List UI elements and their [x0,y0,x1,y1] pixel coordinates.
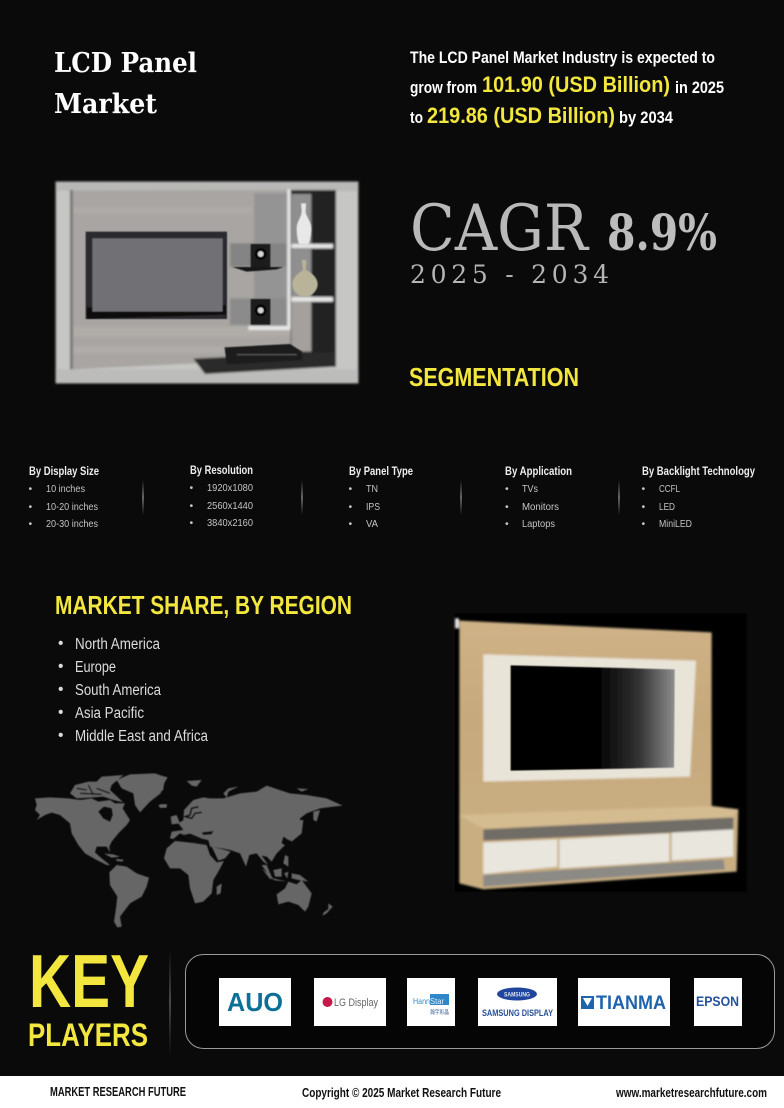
market forecast statement: by 2034 [619,108,673,127]
region list: Asia Pacific [75,705,144,722]
segment: by backlight technology [642,464,755,530]
segment: by resolution: 1920x1080 [207,482,253,494]
segment: by display size: By Display Size [29,464,99,478]
segment: by resolution: By Resolution [190,463,253,477]
segment: by resolution: • [190,500,194,512]
segment: by resolution: • [190,517,194,529]
segment: by resolution: 3840x2160 [207,517,253,529]
CAGR figure: 8.9% [607,203,717,262]
segment: by display size: 20-30 inches [46,518,98,530]
logo: LG Display: LG Display [334,997,378,1009]
segment: by application: By Application [505,464,572,478]
region list: Europe [75,659,116,676]
market forecast statement: grow from [410,78,477,97]
logo: HannStar: Hann [413,997,430,1006]
CAGR figure: CAGR [410,192,590,266]
panel: company logos [186,954,774,1048]
logo: Epson: EPSON [696,994,739,1009]
segment: by display size: 10-20 inches [46,501,98,513]
world map [35,773,343,927]
segment: by panel type [348,464,413,530]
segment: by backlight technology: By Backlight Technology [642,464,755,478]
market forecast statement [410,48,724,128]
region list: • [58,658,63,675]
region list: • [58,635,63,652]
CAGR figure [410,192,717,289]
segment: by backlight technology: • [642,483,646,495]
segment: by application [505,464,572,530]
segment: by application: • [505,518,509,530]
region list: • [58,727,63,744]
logo: Samsung Display: SAMSUNG [504,992,530,998]
segment: by backlight technology: • [642,501,646,513]
segment: by backlight technology: MiniLED [659,518,692,530]
market forecast statement: 219.86 (USD Billion) [427,103,615,128]
logo: Tianma: TIANMA [596,993,666,1014]
segment: by display size: • [28,518,32,530]
segment: by display size: • [28,483,32,495]
market forecast statement: to [410,108,423,127]
logo: HannStar: 瀚宇彩晶 [430,1008,449,1016]
segment: by application: • [505,483,509,495]
segment: by panel type: • [348,518,352,530]
logo: AUO: AUO [227,987,283,1017]
region list: • [58,704,63,721]
heading: key players [28,939,149,1053]
market forecast statement: 101.90 (USD Billion) [482,72,670,97]
segment: by application: TVs [522,483,538,495]
heading: market share by region: MARKET SHARE, BY REGION [55,590,352,620]
logo: HannStar: Star [430,997,444,1006]
logo: HannStar [407,978,455,1026]
region list: North America [75,636,160,653]
market forecast statement: The LCD Panel Market Industry is expected to [410,48,715,67]
region list: • [58,681,63,698]
segment: by display size: • [28,501,32,513]
logo: Samsung Display: SAMSUNG DISPLAY [482,1008,554,1019]
title [54,47,197,120]
image: TV on wooden wall panel with cabinet [455,613,747,892]
region list [58,635,208,745]
segment: by backlight technology: LED [659,501,675,513]
logo: Epson [694,978,742,1026]
title: LCD Panel [54,47,197,79]
segment: by panel type: VA [366,518,378,530]
segment: by application: Monitors [522,501,559,513]
heading: segmentation: SEGMENTATION [409,364,579,392]
CAGR figure: 2025 - 2034 [410,260,609,289]
footer bar: MARKET RESEARCH FUTURE [50,1085,186,1099]
segment: by resolution [190,463,253,529]
segment: by resolution: • [190,482,194,494]
image: wall-mounted TV unit on grey panel [56,182,358,383]
segment: by panel type: • [348,483,352,495]
heading: key players: KEY [29,939,149,1023]
logo: LG Display [314,978,386,1026]
logo: Tianma [578,978,670,1026]
heading: key players: PLAYERS [28,1017,148,1053]
region list: Middle East and Africa [75,728,208,745]
logo: Samsung Display [478,978,557,1026]
footer bar: Copyright © 2025 Market Research Future [302,1086,501,1100]
map: europe, africa, asia, oceania [160,777,343,916]
segment: by backlight technology: • [642,518,646,530]
logo: AUO [219,978,291,1026]
region list: South America [75,682,161,699]
segment: by panel type: TN [366,483,378,495]
segment: by application: • [505,501,509,513]
segment: by panel type: IPS [366,501,380,513]
segment: by application: Laptops [522,518,555,530]
title: Market [54,88,157,120]
map: americas [35,773,167,927]
segment: by panel type: • [348,501,352,513]
segment: by display size [28,464,99,530]
market forecast statement: in 2025 [675,78,724,97]
segment: by resolution: 2560x1440 [207,500,253,512]
segment: by panel type: By Panel Type [349,464,413,478]
segment: by display size: 10 inches [46,483,85,495]
footer bar [0,1076,784,1108]
segment: by backlight technology: CCFL [659,483,680,495]
